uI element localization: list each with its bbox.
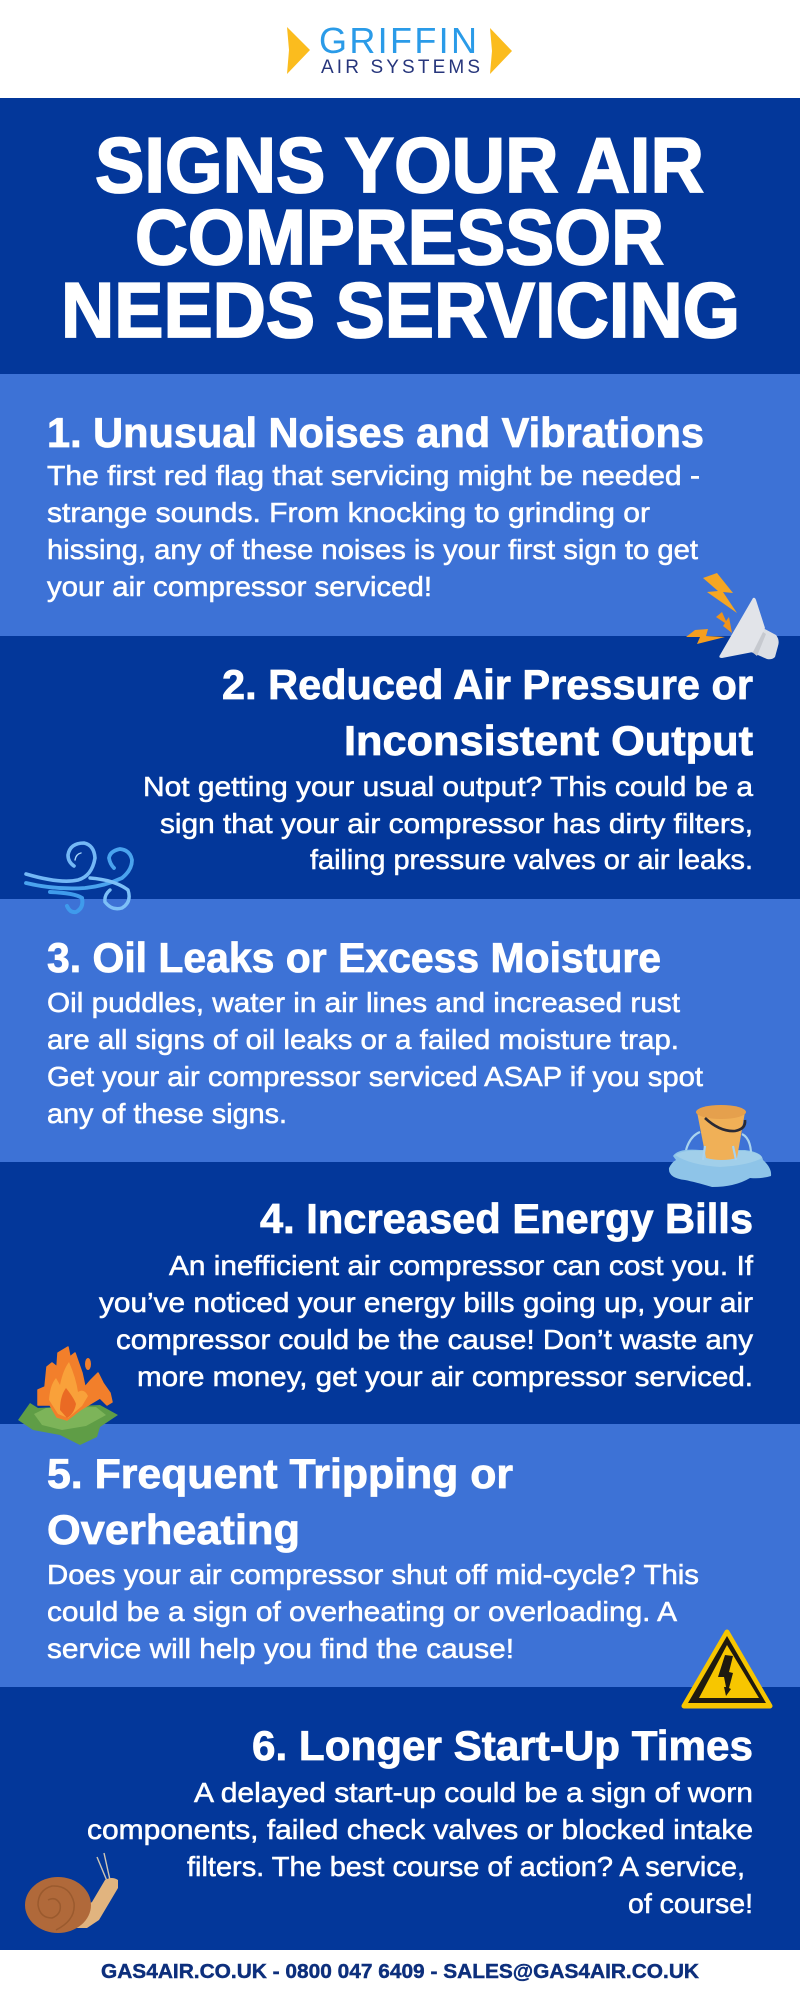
icon: wind swirls bbox=[26, 843, 132, 912]
panel: 1 unusual noises: your air compressor serviced! bbox=[47, 571, 432, 602]
panel: 1 unusual noises: hissing, any of these noises is your first sign to get bbox=[47, 534, 698, 565]
icon: snail bbox=[25, 1853, 118, 1933]
title banner bbox=[0, 98, 800, 374]
panel: 4 energy bills: compressor could be the cause! Don’t waste any bbox=[116, 1324, 753, 1355]
panel: 6 longer start-up: 6. Longer Start-Up Times bbox=[252, 1722, 753, 1769]
icon: high voltage warning triangle bbox=[684, 1632, 770, 1706]
panel: 5 frequent tripping bbox=[0, 1424, 800, 1687]
logo: Griffin Air Systems bbox=[287, 20, 512, 78]
icon: megaphone with orange bolts bbox=[686, 573, 779, 659]
title banner: NEEDS SERVICING bbox=[61, 266, 740, 354]
panel: 3 oil leaks: Get your air compressor serviced ASAP if you spot bbox=[47, 1061, 703, 1092]
footer: contact details: GAS4AIR.CO.UK - 0800 047 6409 - SALES@GAS4AIR.CO.UK bbox=[101, 1960, 699, 1983]
panel: 1 unusual noises: The first red flag that servicing might be needed - bbox=[47, 460, 700, 491]
logo: Griffin Air Systems: AIR SYSTEMS bbox=[321, 57, 480, 78]
panel: 4 energy bills: more money, get your air compressor serviced. bbox=[137, 1361, 753, 1392]
panel: 2 reduced air pressure: 2. Reduced Air Pressure or bbox=[222, 661, 753, 708]
panel: 5 frequent tripping: 5. Frequent Tripping or bbox=[47, 1450, 513, 1497]
panel: 4 energy bills: An inefficient air compressor can cost you. If bbox=[169, 1250, 753, 1281]
icon: burning banknotes bbox=[18, 1347, 118, 1445]
panel: 3 oil leaks: 3. Oil Leaks or Excess Moisture bbox=[47, 934, 661, 981]
panel: 2 reduced air pressure: Inconsistent Output bbox=[344, 717, 753, 764]
panel: 3 oil leaks: Oil puddles, water in air lines and increased rust bbox=[47, 987, 680, 1018]
panel: 2 reduced air pressure bbox=[0, 636, 800, 899]
panel: 6 longer start-up: A delayed start-up could be a sign of worn bbox=[194, 1777, 753, 1808]
panel: 5 frequent tripping: service will help you find the cause! bbox=[47, 1633, 514, 1664]
panel: 2 reduced air pressure: failing pressure valves or air leaks. bbox=[310, 844, 753, 875]
panel: 5 frequent tripping: Overheating bbox=[47, 1506, 300, 1553]
panel: 2 reduced air pressure: Not getting your usual output? This could be a bbox=[143, 771, 753, 802]
title banner: COMPRESSOR bbox=[135, 193, 664, 281]
logo: Griffin Air Systems: GRIFFIN bbox=[319, 20, 477, 61]
panel: 4 energy bills bbox=[0, 1162, 800, 1424]
panel: 6 longer start-up: of course! bbox=[628, 1888, 753, 1919]
panel: 5 frequent tripping: Does your air compressor shut off mid-cycle? This bbox=[47, 1559, 699, 1590]
panel: 6 longer start-up: components, failed check valves or blocked intake bbox=[87, 1814, 753, 1845]
panel: 6 longer start-up bbox=[0, 1687, 800, 1950]
panel: 4 energy bills: 4. Increased Energy Bills bbox=[260, 1195, 753, 1242]
panel: 1 unusual noises: strange sounds. From knocking to grinding or bbox=[47, 497, 650, 528]
icon: leaking bucket in puddle bbox=[669, 1105, 771, 1187]
panel: 2 reduced air pressure: sign that your air compressor has dirty filters, bbox=[160, 808, 753, 839]
panel: 6 longer start-up: filters. The best course of action? A service, bbox=[187, 1851, 745, 1882]
panel: 1 unusual noises: 1. Unusual Noises and Vibrations bbox=[47, 409, 704, 456]
panel: 3 oil leaks: any of these signs. bbox=[47, 1098, 287, 1129]
panel: 1 unusual noises bbox=[0, 374, 800, 636]
panel: 3 oil leaks bbox=[0, 899, 800, 1162]
title banner: SIGNS YOUR AIR bbox=[95, 121, 704, 209]
panel: 5 frequent tripping: could be a sign of overheating or overloading. A bbox=[47, 1596, 677, 1627]
panel: 3 oil leaks: are all signs of oil leaks or a failed moisture trap. bbox=[47, 1024, 679, 1055]
panel: 4 energy bills: you’ve noticed your energy bills going up, your air bbox=[99, 1287, 753, 1318]
